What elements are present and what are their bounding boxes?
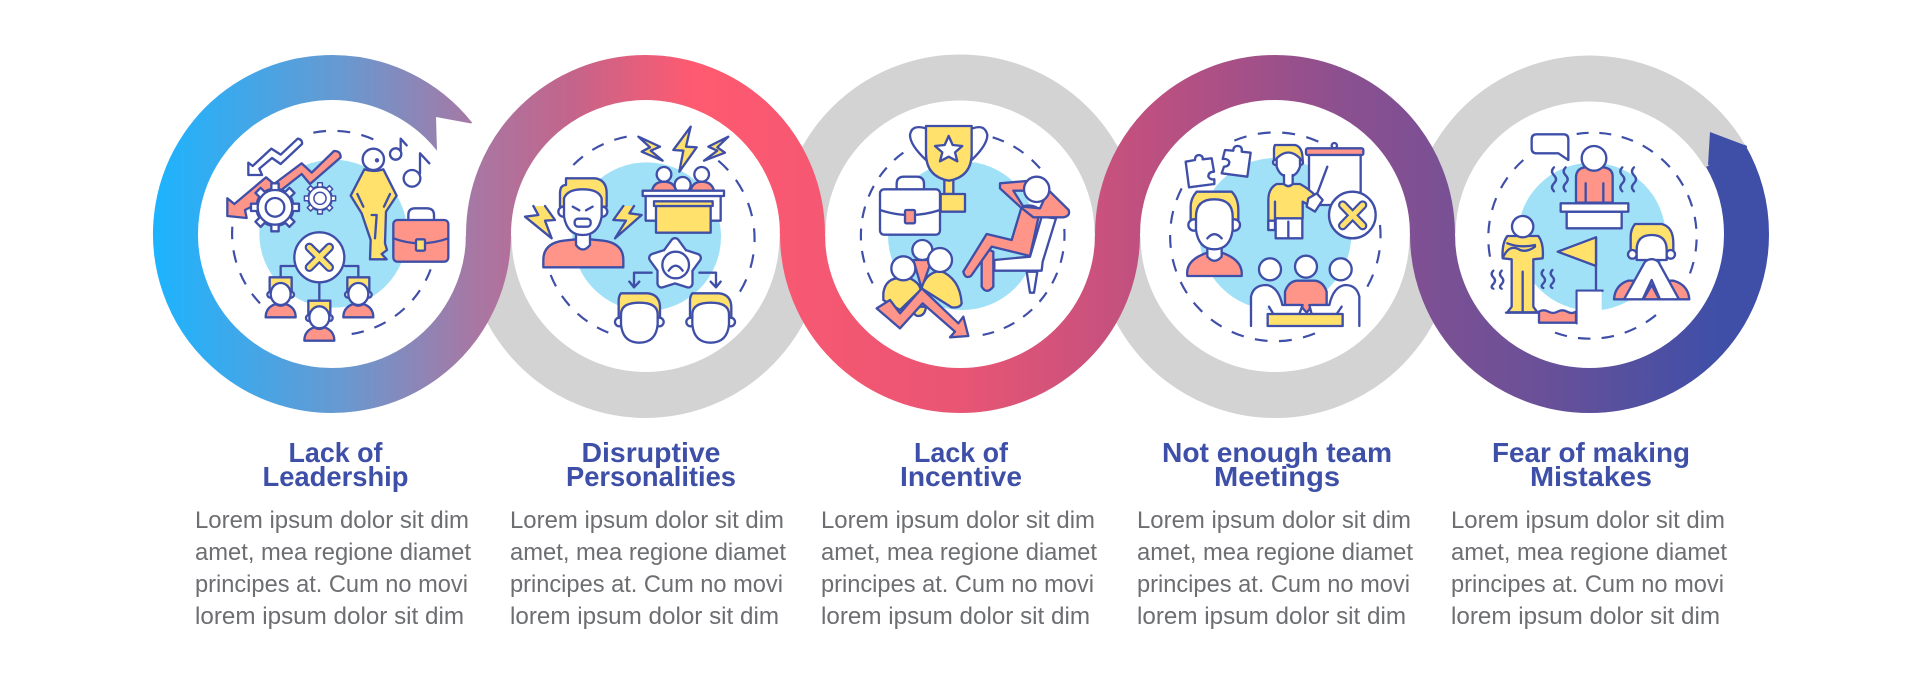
body text: Lorem ipsum dolor sit dim <box>195 507 469 534</box>
body text: principes at. Cum no movi <box>1137 571 1410 598</box>
icon: lack of incentive <box>861 126 1069 337</box>
heading: Not enough team <box>1162 437 1392 468</box>
body text: amet, mea regione diamet <box>1451 539 1727 566</box>
body text <box>1137 507 1413 630</box>
text block: Fear of making Mistakes <box>1451 437 1727 630</box>
body text: amet, mea regione diamet <box>510 539 786 566</box>
body text: amet, mea regione diamet <box>1137 539 1413 566</box>
heading: Leadership <box>262 461 408 492</box>
body text: Lorem ipsum dolor sit dim <box>1137 507 1411 534</box>
heading <box>566 437 736 492</box>
body text: principes at. Cum no movi <box>195 571 468 598</box>
body text: amet, mea regione diamet <box>821 539 1097 566</box>
body text <box>195 507 471 630</box>
heading: Personalities <box>566 461 736 492</box>
heading: Incentive <box>900 461 1022 492</box>
body text: Lorem ipsum dolor sit dim <box>510 507 784 534</box>
body text: principes at. Cum no movi <box>821 571 1094 598</box>
text block: Not enough team Meetings <box>1137 437 1413 630</box>
body text: principes at. Cum no movi <box>1451 571 1724 598</box>
text block: Lack of Incentive <box>821 437 1097 630</box>
text block: Disruptive Personalities <box>510 437 786 630</box>
text block: Lack of Leadership <box>195 437 471 630</box>
icon: fear of making mistakes <box>1488 133 1697 339</box>
heading: Disruptive <box>582 437 720 468</box>
heading <box>262 437 408 492</box>
body text: lorem ipsum dolor sit dim <box>1451 603 1720 630</box>
heading <box>900 437 1022 492</box>
body text: Lorem ipsum dolor sit dim <box>821 507 1095 534</box>
heading: Lack of <box>914 437 1009 468</box>
body text <box>821 507 1097 630</box>
body text: amet, mea regione diamet <box>195 539 471 566</box>
icon: lack of leadership <box>227 131 448 341</box>
body text: lorem ipsum dolor sit dim <box>821 603 1090 630</box>
heading <box>1162 437 1392 492</box>
body text: lorem ipsum dolor sit dim <box>510 603 779 630</box>
icon: not enough team meetings <box>1170 132 1381 341</box>
grey background rings <box>488 78 1725 395</box>
body text <box>510 507 786 630</box>
body text: lorem ipsum dolor sit dim <box>1137 603 1406 630</box>
body text: lorem ipsum dolor sit dim <box>195 603 464 630</box>
heading: Lack of <box>288 437 383 468</box>
icon: disruptive personalities <box>525 127 755 343</box>
heading: Mistakes <box>1530 461 1652 492</box>
body text: Lorem ipsum dolor sit dim <box>1451 507 1725 534</box>
body text <box>1451 507 1727 630</box>
heading <box>1492 437 1690 492</box>
gradient ribbon with arrow ends <box>176 77 1747 391</box>
heading: Meetings <box>1214 461 1340 492</box>
body text: principes at. Cum no movi <box>510 571 783 598</box>
heading: Fear of making <box>1492 437 1690 468</box>
